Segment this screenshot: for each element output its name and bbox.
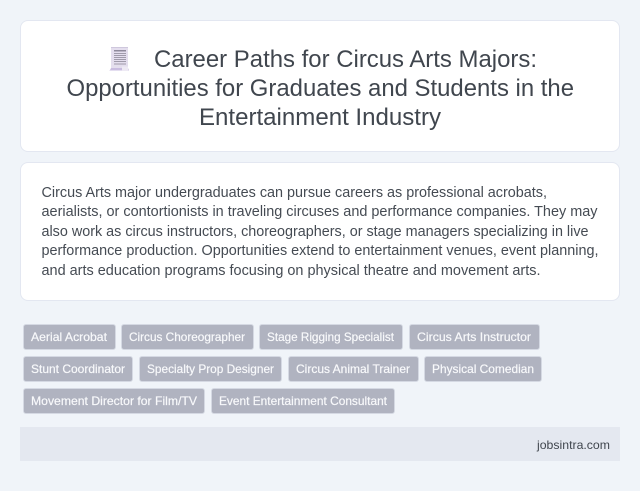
tag labels: Specialty Prop Designer	[147, 362, 274, 376]
tag labels: Aerial Acrobat	[31, 330, 108, 344]
tag: Specialty Prop Designer	[139, 356, 282, 382]
footer bar	[20, 427, 620, 461]
description text: and arts education programs focusing on physical theatre and movement arts.	[42, 263, 540, 279]
description text	[42, 185, 598, 279]
title: Entertainment Industry	[199, 104, 441, 131]
tag labels: Circus Choreographer	[129, 330, 245, 344]
tag: Stage Rigging Specialist	[259, 324, 403, 350]
tag labels: Movement Director for Film/TV	[31, 394, 197, 408]
title: Career Paths for Circus Arts Majors:	[154, 46, 537, 73]
description text: also work as circus instructors, choreographers, or stage managers specializing in live	[42, 224, 588, 240]
panel: header	[20, 20, 620, 152]
description text: Circus Arts major undergraduates can pursue careers as professional acrobats,	[42, 185, 547, 201]
tag labels: Stage Rigging Specialist	[267, 330, 395, 344]
icon: paper scroll	[109, 47, 129, 71]
tag labels: Circus Arts Instructor	[417, 330, 531, 344]
tag labels	[31, 330, 534, 408]
description text: aerialists, or contortionists in traveling circuses and performance companies. They may	[42, 204, 598, 220]
description text: performance production. Opportunities extend to entertainment venues, event planning,	[42, 243, 598, 259]
footer source text: jobsintra.com	[536, 438, 610, 452]
tag: Aerial Acrobat	[23, 324, 116, 350]
tag labels: Event Entertainment Consultant	[219, 394, 388, 408]
tag: Stunt Coordinator	[23, 356, 133, 382]
tag: Circus Animal Trainer	[288, 356, 419, 382]
tag labels: Stunt Coordinator	[31, 362, 125, 376]
title	[66, 46, 574, 131]
tag: Physical Comedian	[424, 356, 542, 382]
tag labels: Circus Animal Trainer	[296, 362, 410, 376]
panel: description	[20, 162, 620, 301]
tag: Circus Arts Instructor	[409, 324, 540, 350]
tag: Movement Director for Film/TV	[23, 388, 205, 414]
title: Opportunities for Graduates and Students in the	[66, 75, 574, 102]
tag: Circus Choreographer	[121, 324, 254, 350]
tag labels: Physical Comedian	[432, 362, 534, 376]
tag: Event Entertainment Consultant	[211, 388, 395, 414]
